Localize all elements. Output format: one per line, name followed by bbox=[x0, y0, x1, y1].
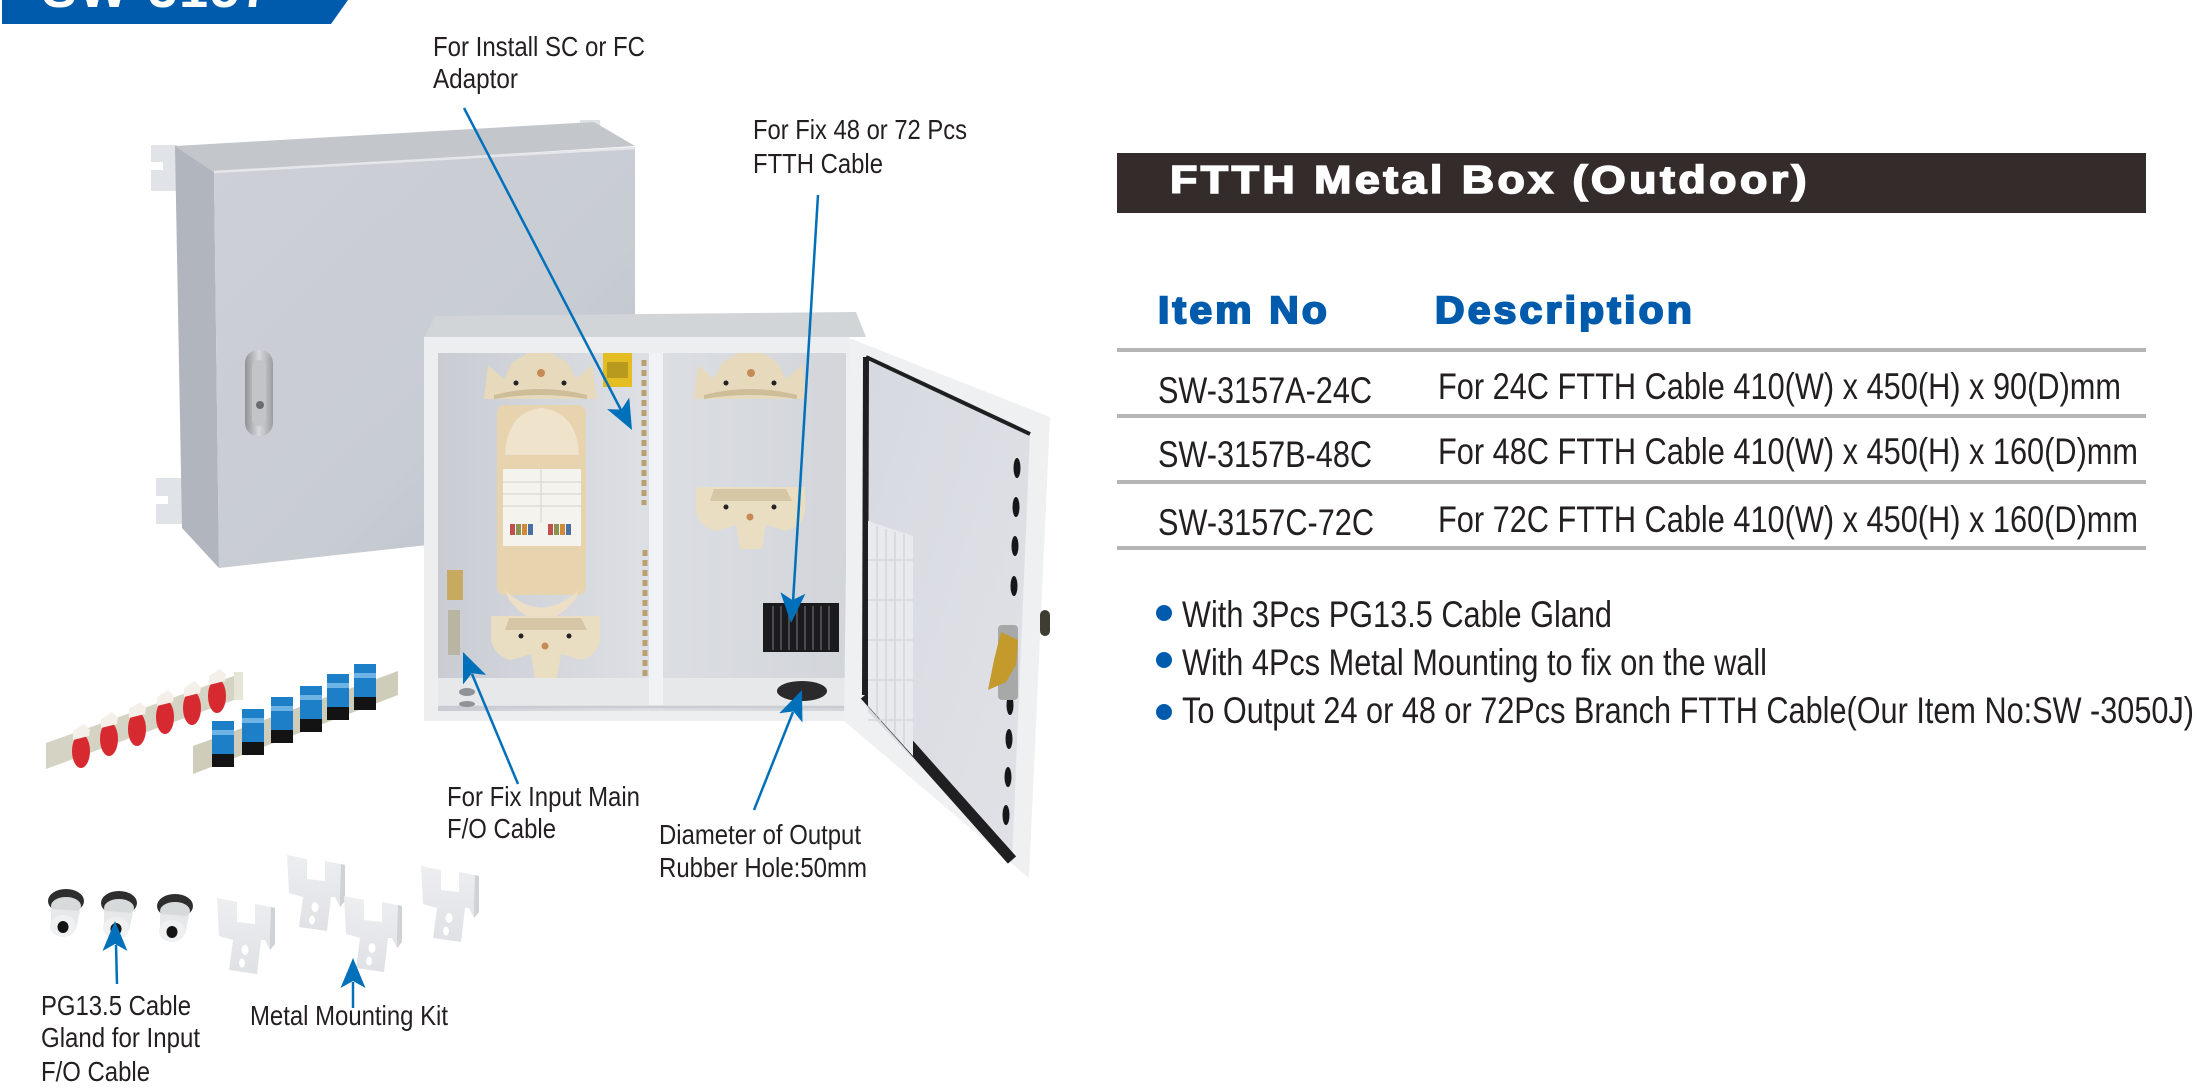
yellow warning tag bbox=[603, 353, 632, 387]
hinges bbox=[847, 380, 862, 682]
label: cable gland: PG13.5 Cable bbox=[41, 990, 191, 1021]
arrow: FTTH cable block bbox=[779, 195, 818, 624]
photo: adaptor strips bbox=[46, 664, 398, 774]
photo: mounting brackets bbox=[217, 855, 479, 974]
photo: closed metal box bbox=[151, 120, 635, 568]
open door bbox=[844, 338, 1050, 878]
label: mounting kit: Metal Mounting Kit bbox=[250, 1000, 448, 1031]
arrow: SC or FC adaptor bbox=[464, 108, 643, 436]
cable tie columns bbox=[644, 360, 645, 680]
door lock bbox=[988, 610, 1050, 700]
label: FTTH cable: For Fix 48 or 72 Pcs bbox=[753, 114, 967, 145]
label: adaptor bbox=[433, 31, 645, 94]
arrow: output rubber hole bbox=[754, 685, 814, 810]
title bar bbox=[1117, 153, 2146, 213]
row: SW-3157A-24C bbox=[1158, 366, 2121, 411]
label: FTTH cable bbox=[753, 114, 967, 179]
lower splice trays bbox=[491, 487, 805, 678]
feature bullets bbox=[1156, 594, 2194, 731]
row: SW-3157A-24C: SW-3157A-24C bbox=[1158, 370, 1372, 411]
label: cable gland: F/O Cable bbox=[41, 1056, 150, 1087]
table bbox=[1117, 290, 2146, 550]
label: rubber hole: Rubber Hole:50mm bbox=[659, 852, 867, 883]
label: input main cable: For Fix Input Main bbox=[447, 781, 640, 812]
photo: open metal box bbox=[424, 312, 1050, 878]
label: rubber hole bbox=[659, 819, 867, 883]
label: cable gland bbox=[41, 990, 200, 1087]
row: SW-3157C-72C: SW-3157C-72C bbox=[1158, 502, 1374, 543]
label: rubber hole: Diameter of Output bbox=[659, 819, 861, 850]
arrow: mounting kit bbox=[340, 958, 366, 1008]
blue SC adaptor strip bbox=[193, 664, 398, 774]
centre splice tray bbox=[497, 405, 586, 620]
arrow: input main cable bbox=[451, 647, 518, 784]
row: SW-3157C-72C bbox=[1158, 499, 2138, 543]
photo: cable glands bbox=[48, 889, 193, 942]
arrow: cable gland bbox=[102, 921, 128, 984]
table header: Item No bbox=[1158, 290, 1330, 332]
left side brackets bbox=[447, 570, 475, 707]
header tab: SW-3157 bbox=[2, 0, 348, 24]
label: adaptor: Adaptor bbox=[433, 63, 518, 94]
table header bbox=[1158, 290, 1695, 332]
label: adaptor: For Install SC or FC bbox=[433, 31, 645, 62]
label: FTTH cable: FTTH Cable bbox=[753, 148, 883, 179]
label: input main cable bbox=[447, 781, 640, 844]
table header: Description bbox=[1435, 290, 1695, 332]
row: SW-3157B-48C: SW-3157B-48C bbox=[1158, 434, 1372, 475]
red FC adaptor strip bbox=[46, 669, 243, 769]
door handle bbox=[245, 350, 273, 436]
label: input main cable: F/O Cable bbox=[447, 813, 556, 844]
top splice trays bbox=[484, 353, 807, 399]
title bar: FTTH Metal Box (Outdoor) bbox=[1170, 159, 1810, 202]
bullet: metal mounting: With 4Pcs Metal Mounting to fix on the wall bbox=[1182, 642, 1767, 683]
black cable block bbox=[763, 603, 839, 652]
label: cable gland: Gland for Input bbox=[41, 1022, 200, 1053]
rubber hole bbox=[777, 681, 827, 701]
bullet: cable gland: With 3Pcs PG13.5 Cable Gland bbox=[1182, 594, 1612, 635]
row: SW-3157B-48C bbox=[1158, 431, 2138, 475]
